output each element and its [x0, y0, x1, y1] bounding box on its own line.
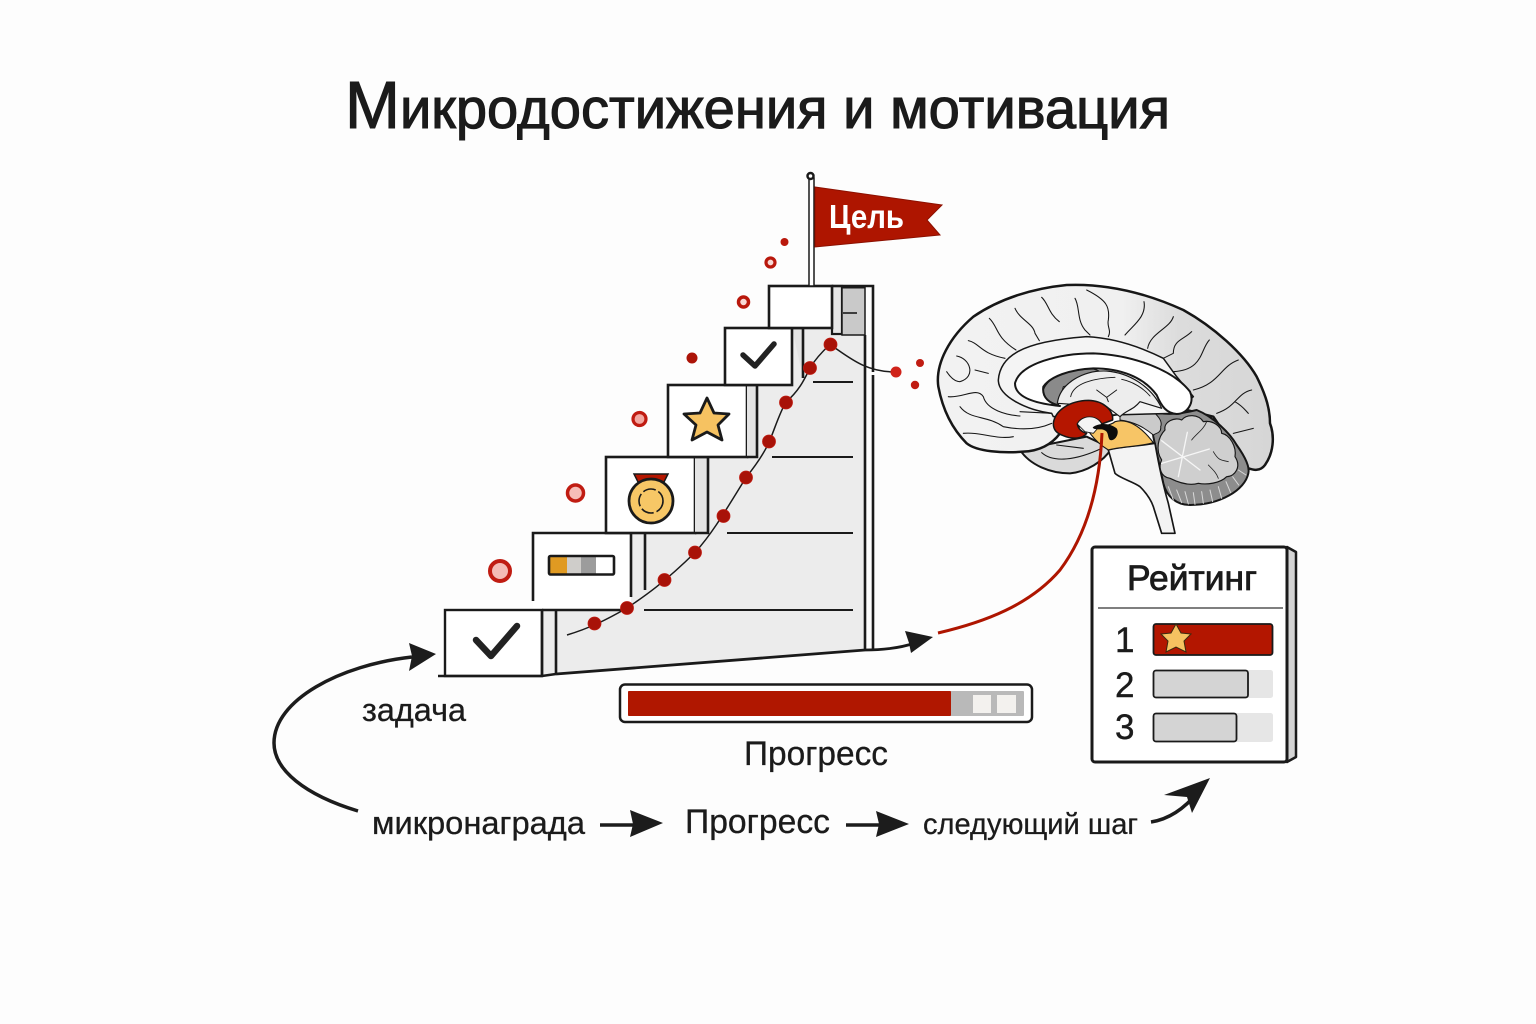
arrow: micro-reward to progress: [600, 810, 663, 837]
brain stem: [1108, 443, 1175, 533]
panel front: [1092, 547, 1287, 762]
step 2 with mini progress bar: [533, 533, 645, 610]
cerebrum: [938, 285, 1273, 470]
temporal lobe: [1020, 437, 1112, 473]
rank 2: [1115, 666, 1273, 705]
arrow head: to brain: [905, 631, 933, 653]
panel body: [1287, 547, 1296, 762]
title: Микродостижения и мотивация: [345, 68, 1170, 143]
flag: goal: [808, 173, 942, 286]
thalamus inner lines: [1071, 377, 1150, 402]
dark fornix: [1043, 369, 1107, 405]
brain: [938, 285, 1273, 533]
ranking panel: [1092, 547, 1296, 762]
cerebellum fissures: [1192, 422, 1228, 478]
staircase of micro-achievements: [438, 286, 933, 676]
step 4 with star: [668, 385, 757, 457]
cerebellum folia: [1168, 470, 1246, 504]
rank 3: 3: [1115, 708, 1134, 747]
panel heading: Рейтинг: [1127, 559, 1257, 598]
cerebellum white star: [1162, 432, 1209, 477]
micro-reward label: микронаграда: [372, 805, 585, 841]
flag: goal: Цель: [829, 198, 904, 235]
rising progress curve with dots: [567, 338, 924, 635]
rank 3: [1115, 708, 1273, 747]
cerebellum inner: [1158, 416, 1238, 484]
cerebellum outer: [1150, 410, 1249, 505]
stair body: [542, 328, 865, 676]
step 6 top block: [769, 286, 865, 335]
step 5 with check: [725, 328, 803, 385]
progress label: Прогресс: [744, 735, 888, 773]
white center: [1077, 417, 1102, 433]
progress step label: Прогресс: [685, 803, 830, 841]
loop arrow: micro-reward back to task: [274, 643, 436, 811]
next step label: следующий шаг: [923, 808, 1138, 841]
thalamus: [1057, 371, 1162, 417]
task label: задача: [362, 692, 466, 728]
rank 1: [1115, 621, 1272, 660]
black nucleus: [1093, 424, 1118, 440]
progress bar: [620, 684, 1032, 722]
arrow: next step to ranking: [1151, 778, 1210, 822]
yellow midbrain: [1090, 421, 1153, 450]
base line to arrow: [556, 643, 915, 674]
step 3 with medal: [606, 457, 708, 533]
tower right edge: [832, 286, 873, 650]
reward dots outside stairs: [490, 238, 788, 581]
arrow: progress to next step: [846, 811, 909, 837]
rank 1: 1: [1115, 621, 1134, 660]
step 1 with check: [438, 610, 622, 676]
tread lines: [644, 313, 857, 610]
red nucleus c-shape: [1053, 400, 1113, 438]
corpus callosum: [1015, 353, 1191, 414]
rank 2: 2: [1115, 666, 1134, 705]
sulci: [947, 290, 1253, 459]
midbrain gray: [1120, 402, 1161, 435]
cingulate band: [998, 337, 1193, 417]
red pathway from brain to stairs arrow: [938, 433, 1102, 633]
